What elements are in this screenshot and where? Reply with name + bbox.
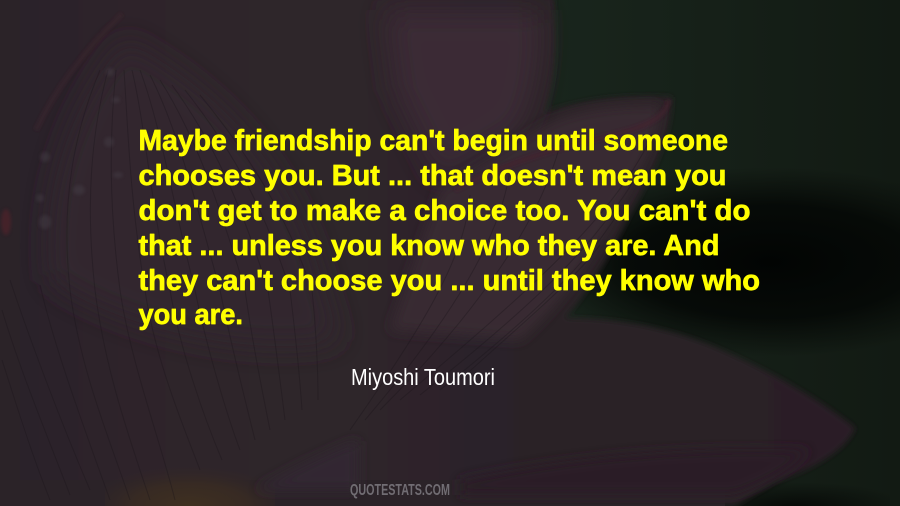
quote text: that ... unless you know who they are. And xyxy=(138,230,720,262)
author name: Miyoshi Toumori xyxy=(351,364,495,390)
watermark: QUOTESTATS.COM xyxy=(350,482,450,499)
petal accent: left red spot xyxy=(1,209,11,235)
water droplets on left petal xyxy=(36,68,123,229)
petal veins on left and centre xyxy=(2,70,650,500)
petal: top centre xyxy=(385,10,541,180)
quote text: they can't choose you ... until they know who xyxy=(138,265,760,297)
quote text: don't get to make a choice too. You can't do xyxy=(138,195,750,227)
petal: left body xyxy=(48,40,340,346)
petal: lower right underside band xyxy=(460,449,810,495)
quote text xyxy=(138,125,760,331)
petal: grey base at lower centre xyxy=(255,440,358,490)
quote text: chooses you. But ... that doesn't mean you xyxy=(138,160,726,192)
petal edge: red rim of left petal xyxy=(36,14,122,130)
petal edge: red rim of right tip xyxy=(455,100,669,190)
background: dark shadow behind petals xyxy=(530,167,900,357)
quote text: Maybe friendship can't begin until someone xyxy=(138,125,728,157)
background: dark corner under lower petal xyxy=(700,466,890,506)
quote text: you are. xyxy=(138,299,243,331)
petal: yellow base glow xyxy=(105,440,275,506)
petal: right pointed tip xyxy=(390,105,660,340)
